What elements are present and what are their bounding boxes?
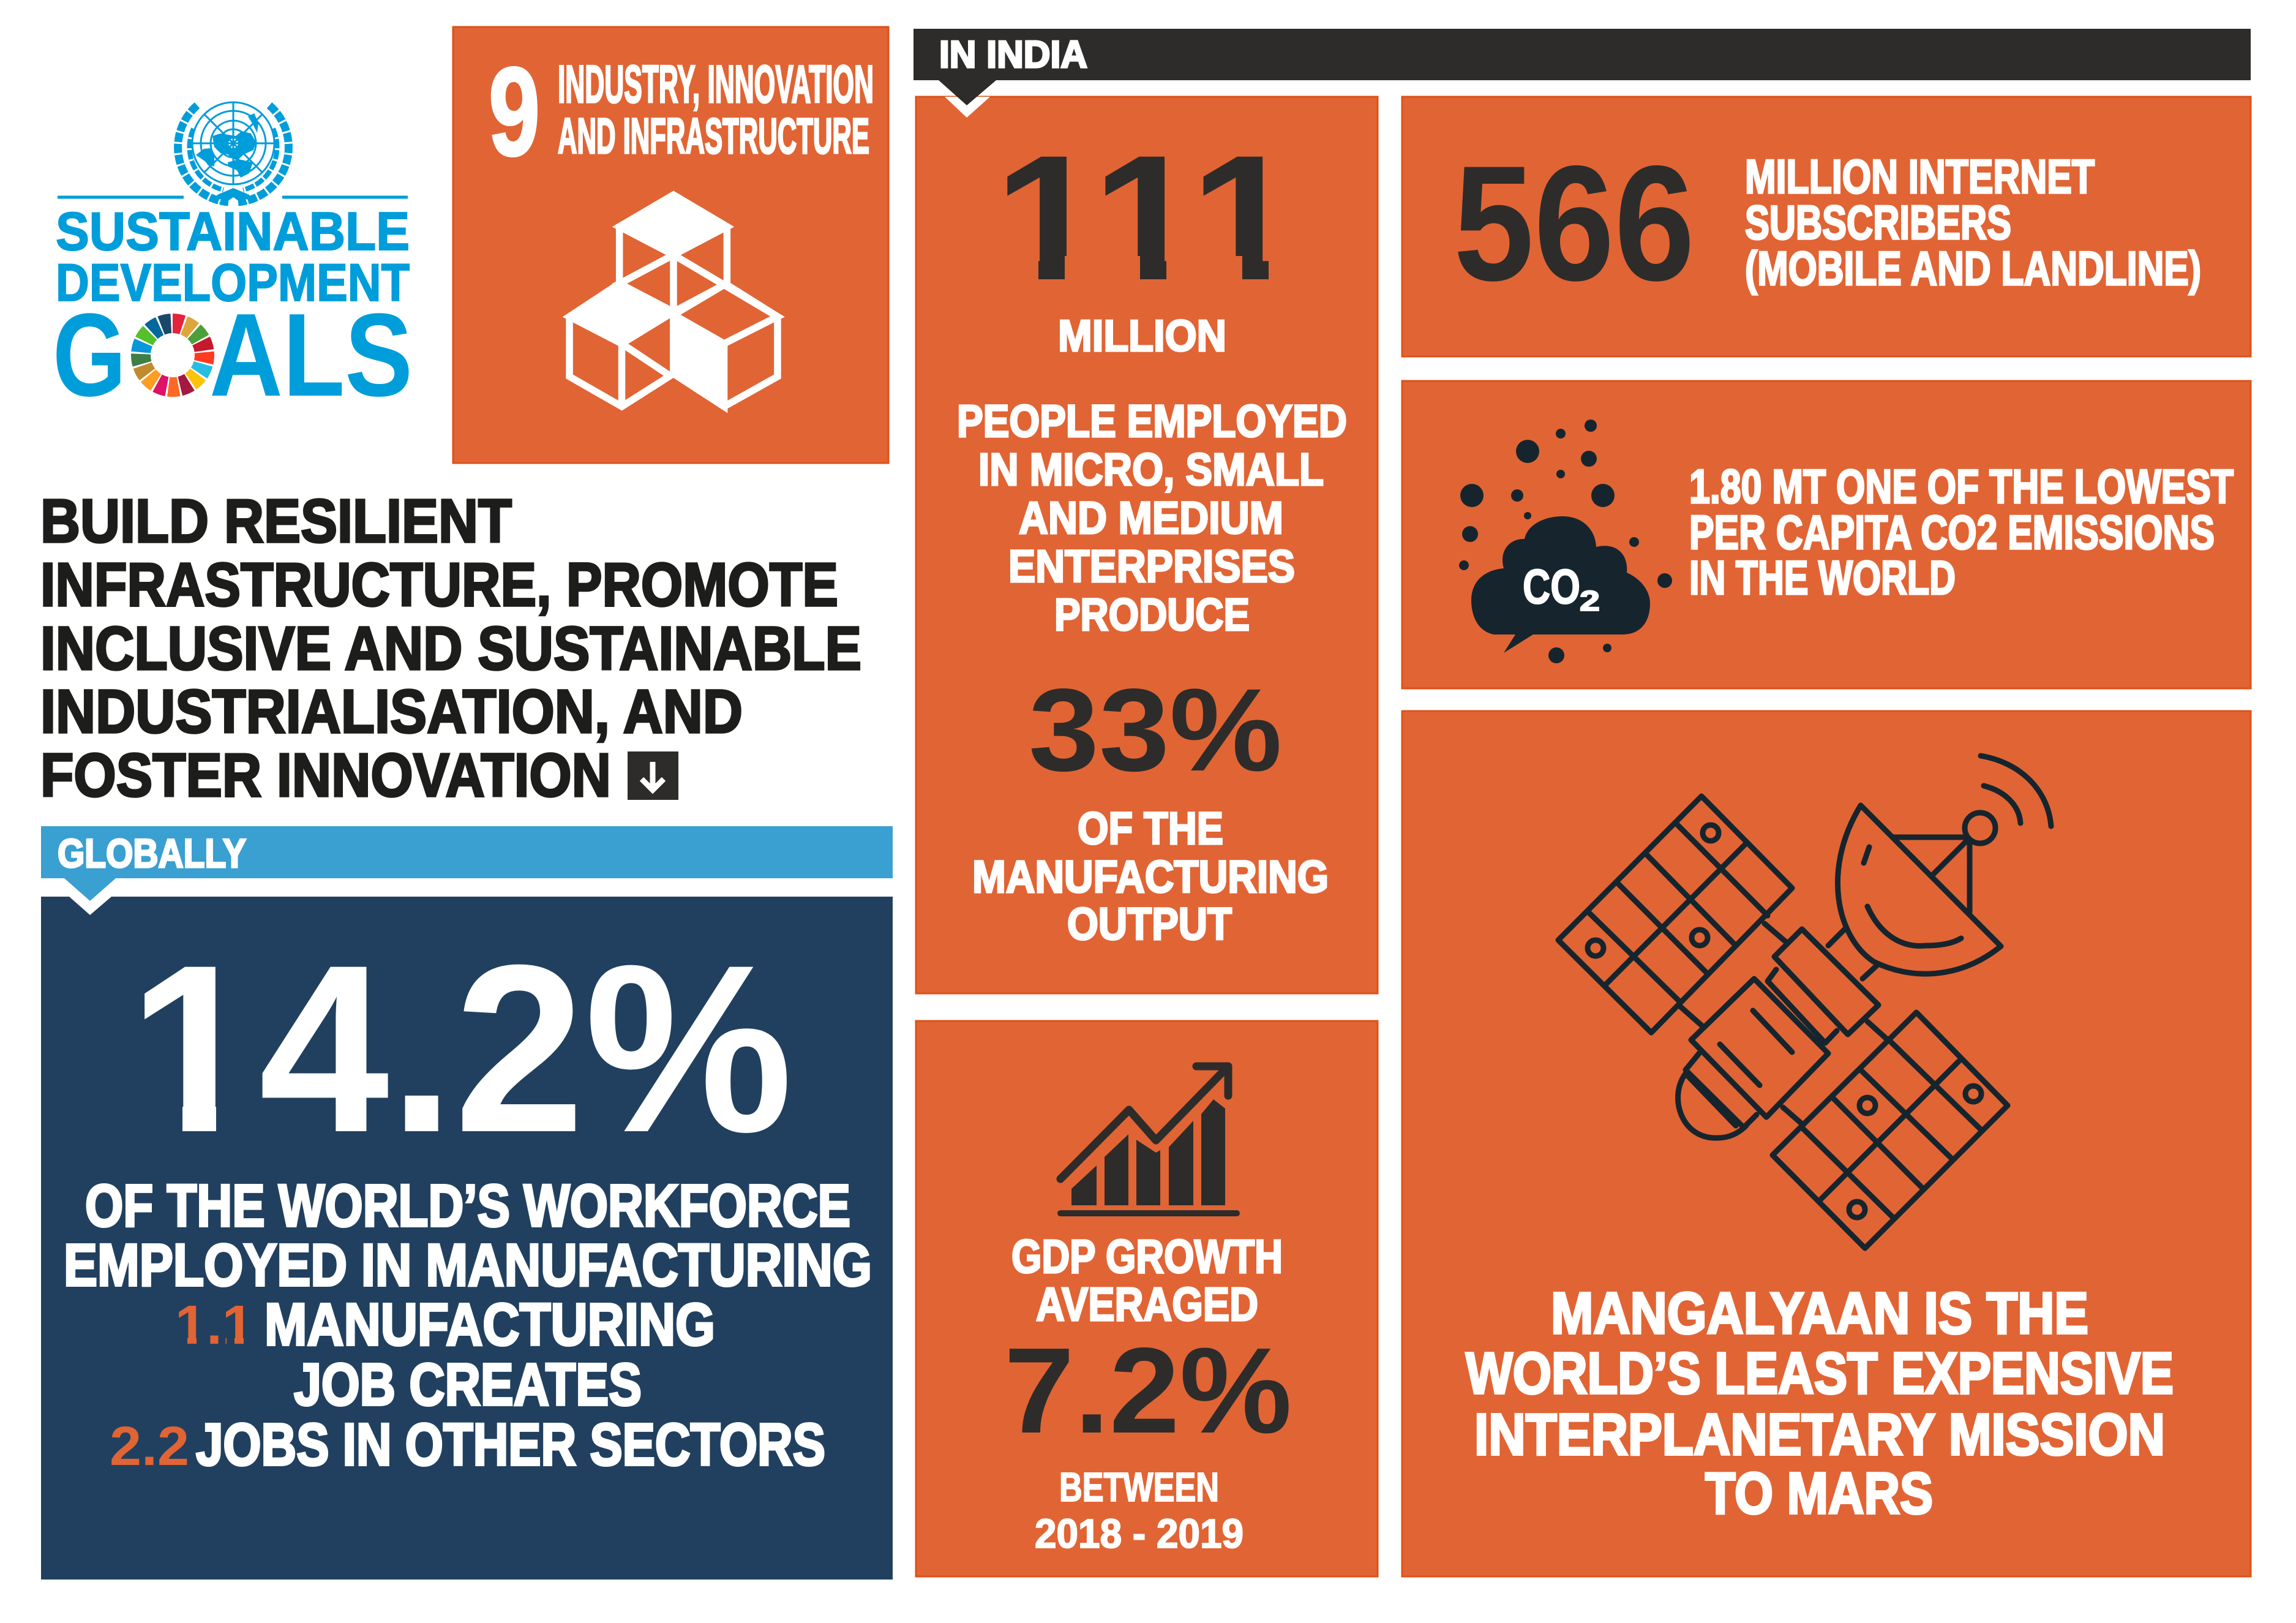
GDP growth text: AVERAGED	[1036, 1278, 1258, 1331]
logo: Sustainable Development Goals	[53, 102, 413, 421]
panel: MSME employment	[916, 97, 1378, 993]
logo line: sustainable: SUSTAINABLE	[56, 201, 410, 262]
subscribers text	[1745, 149, 2201, 295]
emissions text: IN THE WORLD	[1689, 551, 1956, 604]
heading: goal statement: INCLUSIVE AND SUSTAINABLE	[40, 614, 861, 683]
manufacturing job text	[264, 1291, 715, 1418]
workforce text: EMPLOYED IN MANUFACTURING	[64, 1232, 872, 1298]
badge title	[558, 55, 874, 164]
panel: Mangalyaan	[1402, 711, 2251, 1576]
workforce text: OF THE WORLD’S WORKFORCE	[85, 1172, 850, 1239]
big stat: 33%: 33%	[1029, 664, 1282, 796]
period text	[1035, 1464, 1244, 1557]
period text: 2018 - 2019	[1035, 1511, 1244, 1557]
heading: goal statement: INDUSTRIALISATION, AND	[40, 677, 743, 746]
manufacturing output text: MANUFACTURING	[972, 851, 1329, 902]
employment text: ENTERPRISES	[1008, 541, 1295, 592]
manufacturing job text: MANUFACTURING	[264, 1291, 715, 1358]
employment text	[957, 396, 1347, 640]
panel: SDG 9 badge	[453, 27, 888, 463]
badge title: INDUSTRY, INNOVATION	[558, 55, 874, 114]
icon: down arrow box	[628, 751, 678, 800]
panel: CO2 emissions	[1402, 381, 2251, 688]
manufacturing output text: OF THE	[1078, 803, 1223, 854]
big stat: 111: 111	[994, 118, 1299, 317]
icon: UN emblem	[178, 102, 288, 205]
subscribers text: SUBSCRIBERS	[1745, 195, 2011, 249]
Mangalyaan text: MANGALYAAN IS THE	[1551, 1281, 2088, 1346]
globally label: GLOBALLY	[58, 830, 246, 876]
logo line: development: DEVELOPMENT	[56, 254, 410, 312]
heading: goal statement	[40, 487, 861, 810]
million label: MILLION	[1058, 312, 1226, 361]
icon: CO2 cloud: CO	[1523, 559, 1580, 614]
employment text: PEOPLE EMPLOYED	[957, 396, 1347, 446]
badge title: AND INFRASTRUCTURE	[558, 108, 869, 164]
manufacturing output text	[972, 803, 1329, 949]
globally header bar	[41, 826, 893, 901]
panel: GDP growth	[916, 1021, 1378, 1576]
heading: goal statement: BUILD RESILIENT	[40, 487, 512, 555]
big stat: 7.2%: 7.2%	[1004, 1323, 1292, 1459]
icon: SDG colour wheel	[128, 311, 217, 400]
icon: stacked cubes	[569, 195, 778, 407]
workforce text	[64, 1172, 872, 1298]
multiplier 1.1: 1.1	[175, 1295, 253, 1356]
Mangalyaan text	[1466, 1281, 2174, 1526]
employment text: AND MEDIUM	[1019, 492, 1283, 543]
period text: BETWEEN	[1059, 1464, 1219, 1510]
chevron notch	[945, 97, 990, 118]
Mangalyaan text: TO MARS	[1705, 1461, 1933, 1526]
subscribers text: MILLION INTERNET	[1745, 149, 2095, 203]
employment text: PRODUCE	[1054, 589, 1250, 640]
employment text: IN MICRO, SMALL	[978, 444, 1324, 495]
in India label: IN INDIA	[939, 34, 1087, 76]
emissions text	[1689, 459, 2234, 604]
other sectors text: JOBS IN OTHER SECTORS	[196, 1411, 825, 1478]
icon: CO2 cloud: 2	[1580, 585, 1600, 617]
header bar: in India	[914, 29, 2251, 105]
badge number: 9	[489, 42, 540, 182]
icon: CO2 cloud	[1459, 420, 1672, 663]
panel: globally	[41, 826, 893, 1580]
manufacturing output text: OUTPUT	[1067, 898, 1232, 949]
icon: satellite	[1558, 756, 2051, 1248]
manufacturing job text: JOB CREATES	[294, 1351, 642, 1418]
multiplier 2.2: 2.2	[110, 1416, 189, 1477]
panel: internet subscribers	[1402, 97, 2251, 356]
logo letters ALS: ALS	[209, 288, 413, 421]
Mangalyaan text: INTERPLANETARY MISSION	[1474, 1402, 2165, 1467]
heading: goal statement: FOSTER INNOVATION	[40, 741, 611, 810]
icon: rising bar chart	[1060, 1066, 1237, 1213]
heading: goal statement: INFRASTRUCTURE, PROMOTE	[40, 551, 838, 619]
Mangalyaan text: WORLD’S LEAST EXPENSIVE	[1466, 1341, 2174, 1406]
divider lines	[58, 196, 408, 198]
GDP growth text: GDP GROWTH	[1011, 1230, 1283, 1283]
logo letter G: G	[53, 288, 126, 421]
GDP growth text	[1011, 1230, 1283, 1331]
big stat: 566: 566	[1454, 131, 1695, 315]
chevron notch	[69, 897, 111, 915]
big stat: 14.2%: 14.2%	[129, 915, 793, 1182]
